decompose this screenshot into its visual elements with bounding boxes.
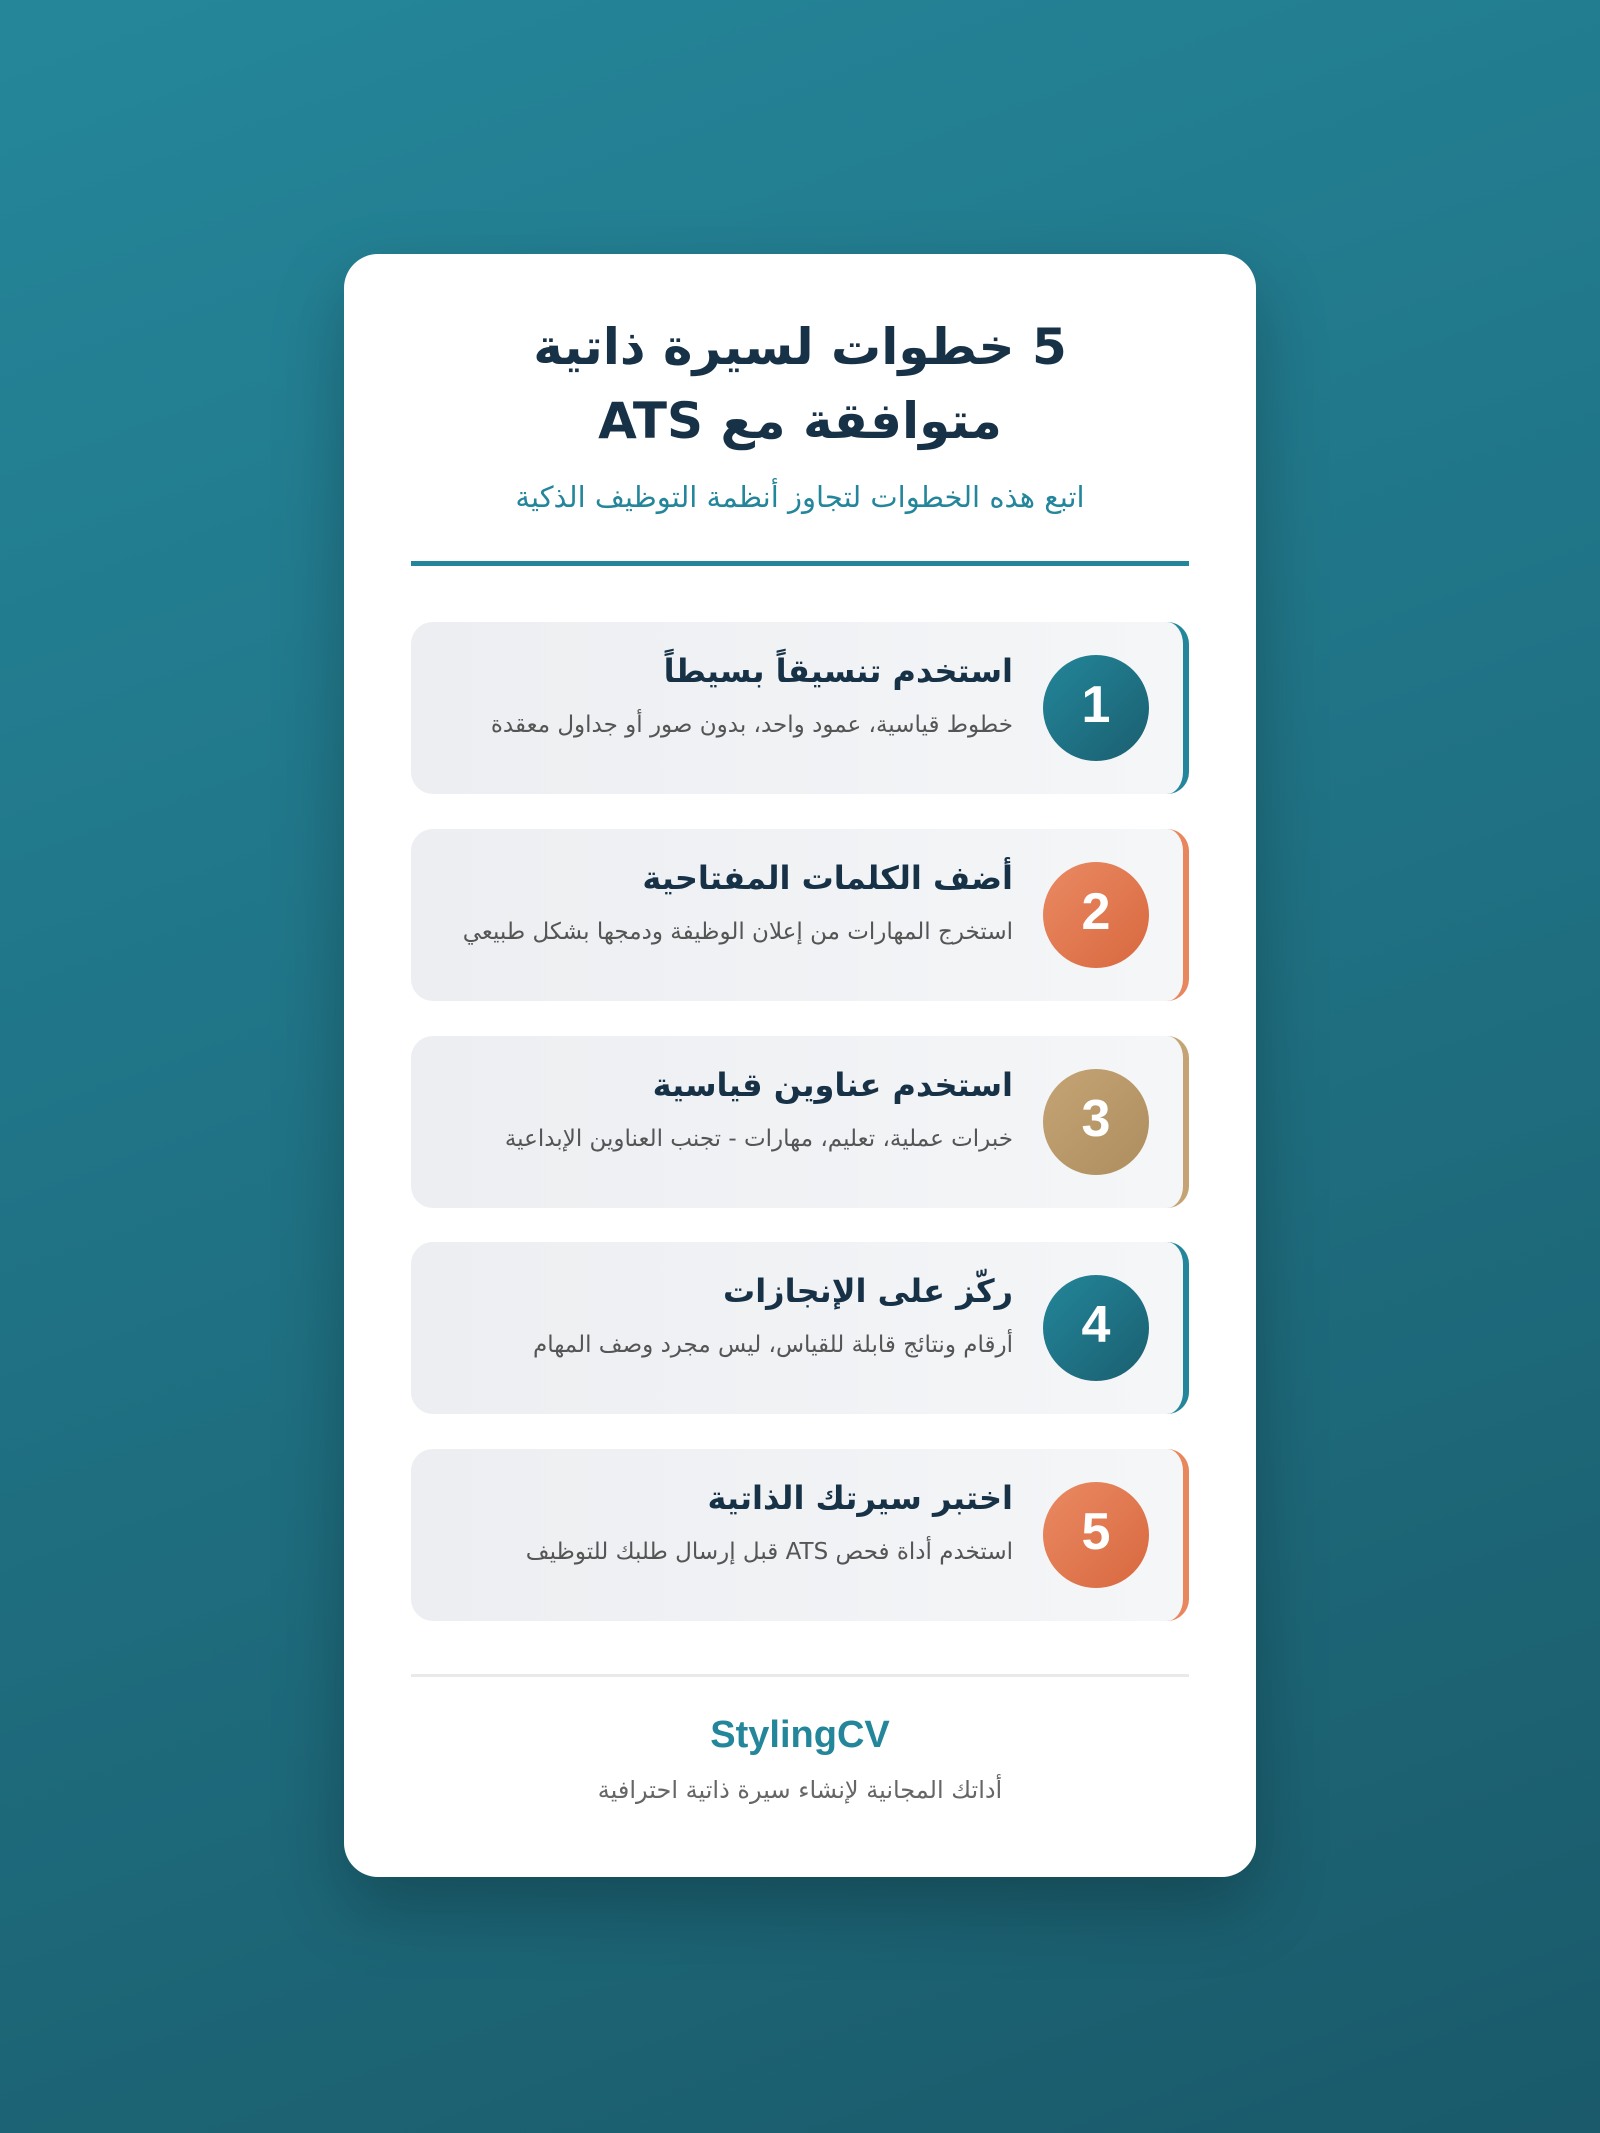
icon: number 4: 4: [1082, 1296, 1110, 1354]
title: 5 خطوات لسيرة ذاتية: [533, 318, 1067, 376]
brand: StylingCV: [710, 1714, 890, 1756]
icon: number 5: 5: [1082, 1503, 1110, 1561]
step 5 title: اختبر سيرتك الذاتية: [707, 1479, 1013, 1517]
icon: number 4: [1043, 1275, 1149, 1381]
step 1 description: خطوط قياسية، عمود واحد، بدون صور أو جداول معقدة: [491, 712, 1013, 738]
icon: number 5: [1043, 1482, 1149, 1588]
step 5 description: استخدم أداة فحص ATS قبل إرسال طلبك للتوظيف: [526, 1539, 1013, 1565]
step 4: [411, 1242, 1189, 1414]
step 5: [411, 1449, 1189, 1621]
step 4 description: أرقام ونتائج قابلة للقياس، ليس مجرد وصف المهام: [533, 1332, 1013, 1358]
step 3 title: استخدم عناوين قياسية: [653, 1066, 1013, 1104]
subtitle: اتبع هذه الخطوات لتجاوز أنظمة التوظيف الذكية: [515, 480, 1085, 514]
step 3 description: خبرات عملية، تعليم، مهارات - تجنب العناوين الإبداعية: [505, 1126, 1013, 1152]
tagline: أداتك المجانية لإنشاء سيرة ذاتية احترافية: [598, 1776, 1002, 1804]
step 1: [411, 622, 1189, 794]
icon: number 1: [1043, 655, 1149, 761]
step 2 description: استخرج المهارات من إعلان الوظيفة ودمجها بشكل طبيعي: [463, 919, 1013, 945]
step 1 title: استخدم تنسيقاً بسيطاً: [664, 652, 1013, 690]
icon: number 3: [1043, 1069, 1149, 1175]
title: [533, 318, 1067, 450]
step 2: [411, 829, 1189, 1001]
card: [344, 254, 1256, 1877]
step 2 title: أضف الكلمات المفتاحية: [642, 859, 1013, 897]
title: متوافقة مع ATS: [598, 392, 1002, 450]
icon: number 1: 1: [1082, 676, 1110, 734]
step 3: [411, 1036, 1189, 1208]
icon: number 2: 2: [1082, 883, 1110, 941]
icon: number 3: 3: [1082, 1090, 1110, 1148]
icon: number 2: [1043, 862, 1149, 968]
step 4 title: ركّز على الإنجازات: [723, 1272, 1013, 1310]
